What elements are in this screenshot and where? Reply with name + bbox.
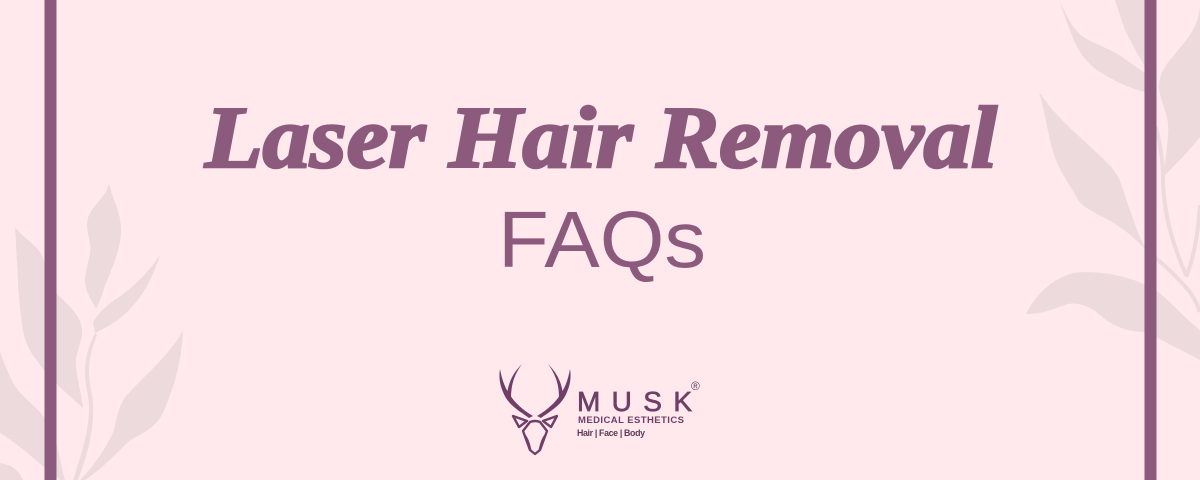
logo: Musk Medical Esthetics xyxy=(499,364,700,454)
logo wordmark: MUSK xyxy=(577,386,692,417)
left antler xyxy=(499,364,533,418)
registered mark: ® xyxy=(691,379,700,393)
right antler xyxy=(537,364,571,418)
icon: deer head xyxy=(499,364,571,454)
subtitle: FAQs xyxy=(498,195,706,284)
logo services: Hair | Face | Body xyxy=(577,428,645,438)
deer face xyxy=(513,416,557,454)
logo tagline: MEDICAL ESTHETICS xyxy=(578,415,684,426)
icon: left leaf sprig xyxy=(0,184,183,480)
right vertical bar xyxy=(1144,0,1156,480)
left vertical bar xyxy=(44,0,56,480)
icon: right leaf sprig xyxy=(1026,0,1200,360)
title: Laser Hair Removal xyxy=(204,90,998,187)
